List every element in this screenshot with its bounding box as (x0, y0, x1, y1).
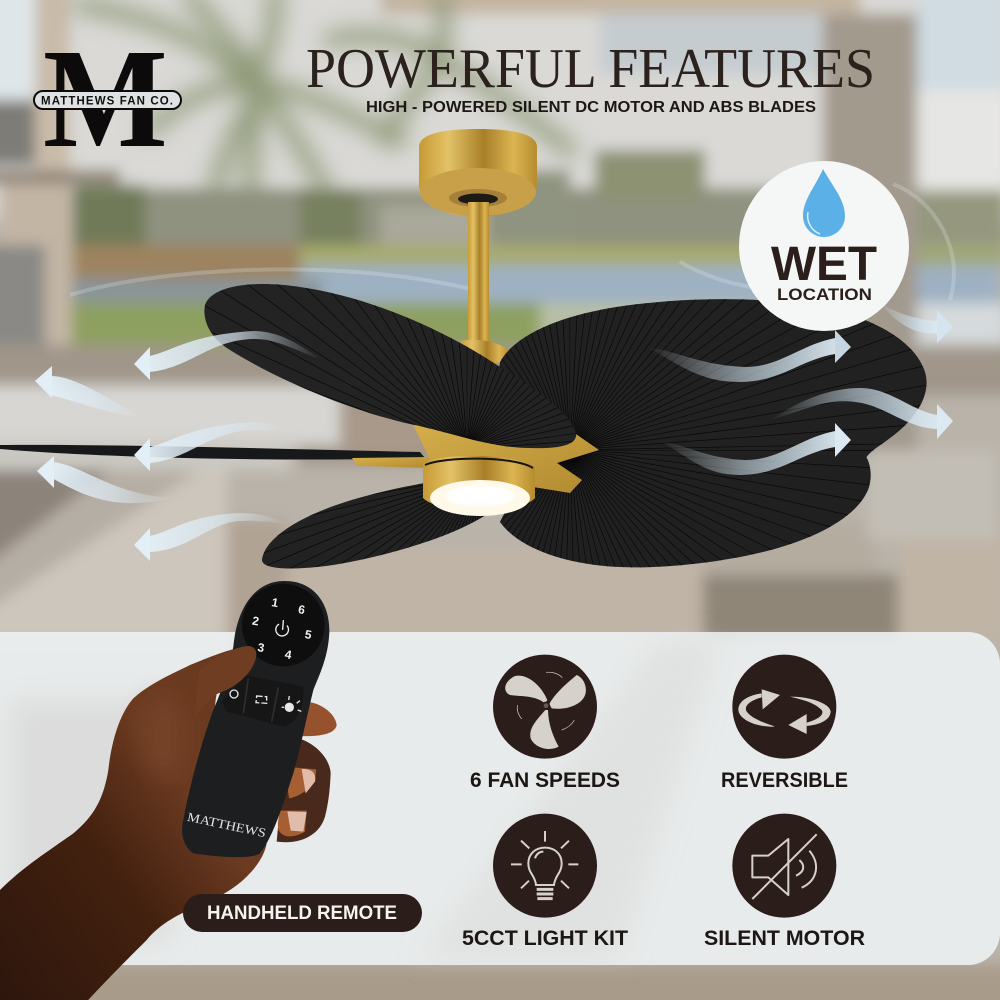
remote keypad numbers: 3 (256, 640, 266, 655)
feature: reversible: REVERSIBLE (721, 769, 848, 792)
remote label pill (183, 894, 422, 932)
arrow left 5 (134, 513, 290, 561)
ceiling fan (0, 129, 940, 650)
arrow left 1 (134, 331, 322, 380)
arrow left 2 (35, 366, 145, 418)
remote control (182, 581, 329, 857)
remote brand text: MATTHEWS (186, 810, 267, 840)
palm fronds (80, 0, 570, 260)
subtitle: HIGH - POWERED SILENT DC MOTOR AND ABS BLADES (366, 99, 816, 116)
icon: water drop (803, 169, 845, 237)
icon: rotation arrows (732, 655, 836, 759)
badge: wet location: WET (771, 238, 877, 291)
bottom info panel background (0, 632, 1000, 965)
feature: silent motor: SILENT MOTOR (704, 927, 865, 950)
motor cap (419, 129, 537, 232)
feature: 6 fan speeds: 6 FAN SPEEDS (470, 769, 620, 792)
arrow left 3 (134, 422, 295, 471)
feature: 5CCT light kit: 5CCT LIGHT KIT (462, 927, 628, 950)
remote keypad numbers: 5 (304, 627, 313, 642)
blade: edge-on left (0, 445, 425, 460)
feature: 5CCT light kit (462, 814, 628, 950)
arrow right 1 (647, 330, 851, 382)
icon: muted speaker (732, 814, 836, 918)
hand and arm (0, 646, 267, 1000)
arrow right 4 (880, 303, 953, 343)
remote keypad numbers: 1 (270, 595, 280, 610)
air flow arrows (35, 303, 953, 561)
remote keypad numbers: 6 (297, 602, 306, 617)
blade: lower left (262, 483, 485, 568)
badge: wet location: LOCATION (777, 285, 872, 304)
remote label pill: HANDHELD REMOTE (207, 903, 397, 924)
gold blade brackets (352, 418, 599, 493)
arrow right 2 (770, 388, 953, 439)
blade: upper left (204, 284, 576, 448)
feature: 6 fan speeds (470, 655, 620, 792)
blade: upper right (500, 299, 927, 466)
blade: lower right (500, 457, 871, 568)
remote keypad numbers: 2 (251, 614, 260, 629)
remote keypad numbers: 4 (284, 647, 293, 662)
feature: silent motor (704, 814, 865, 950)
faint air trails around the fan (70, 184, 954, 300)
badge: wet location (739, 161, 909, 331)
arrow right 3 (660, 423, 851, 475)
hand holding remote (0, 581, 337, 1000)
panel soft shading (10, 640, 720, 960)
fingers behind remote (277, 702, 337, 842)
logo: Matthews Fan Co.: MATTHEWS FAN CO. (41, 96, 173, 108)
arrow left 4 (37, 456, 175, 503)
downrod and collar (460, 200, 509, 365)
feature: reversible (721, 655, 848, 792)
icon: fan (493, 655, 597, 759)
motor housing and light (423, 456, 535, 516)
power icon (276, 621, 288, 636)
title: POWERFUL FEATURES (306, 38, 875, 100)
logo: Matthews Fan Co.: M (43, 20, 168, 177)
icon: light bulb (493, 814, 597, 918)
remote light and reverse icons (230, 690, 301, 711)
thumb over remote (195, 646, 256, 717)
remote keypad numbers (251, 595, 313, 662)
